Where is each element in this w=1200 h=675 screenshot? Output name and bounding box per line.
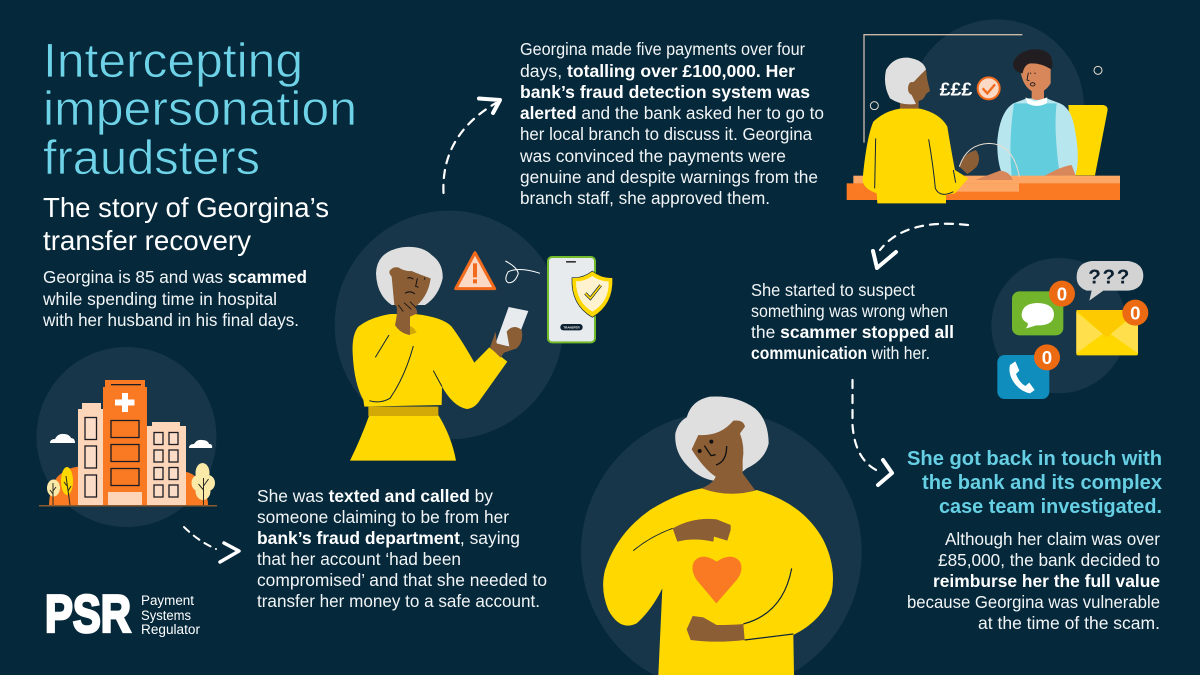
illustration: Georgina with phone (335, 211, 613, 461)
text block: outcome: Although her claim was over (945, 529, 1160, 549)
clouds (50, 434, 212, 448)
envelope icon: 0 (1130, 302, 1141, 323)
text block: introduction (42, 267, 307, 330)
skirt (350, 415, 456, 461)
phone in hand (495, 307, 528, 347)
message icon (1012, 281, 1075, 335)
arrow: to payments text (443, 98, 500, 193)
text block: introduction: while spending time in hospital (42, 289, 277, 309)
arrow: branch to suspect text (873, 224, 968, 268)
speech bubble (1077, 261, 1143, 301)
text block: texted and called: that her account ‘had been (257, 549, 461, 569)
illustration: message icons (991, 258, 1148, 399)
title (43, 35, 357, 185)
text block: payments (519, 39, 824, 208)
jumper (603, 488, 833, 675)
hair (675, 396, 769, 481)
text block: texted and called (257, 486, 547, 611)
heading: outcome: the bank and its complex (922, 472, 1162, 494)
chair (1068, 105, 1108, 175)
right building (147, 422, 186, 505)
pounds and tick: £££ (940, 78, 972, 99)
phone with shield (548, 257, 613, 342)
centre building (103, 380, 147, 505)
phone with shield: TRANSFER (563, 325, 580, 329)
lower hand (687, 616, 745, 642)
heart (692, 557, 741, 603)
text block: outcome: at the time of the scam. (978, 613, 1160, 633)
illustration: Georgina happy (581, 396, 862, 675)
phone icon: 0 (1042, 347, 1052, 368)
warning triangle (456, 253, 495, 289)
counter (853, 176, 1120, 184)
face and neck (692, 420, 755, 495)
neck and face (389, 267, 431, 312)
squiggle (505, 261, 540, 283)
bank clerk (997, 49, 1078, 177)
illustration: bank branch (847, 19, 1120, 203)
text block: payments: her local branch to discuss it. Georgina (520, 124, 812, 144)
message icon: 0 (1057, 283, 1067, 304)
text block: suspicion (751, 280, 954, 363)
envelope icon (1076, 300, 1148, 355)
text block: payments: bank’s fraud detection system was (520, 82, 810, 102)
arrow: suspicion to outcome (852, 380, 892, 485)
phone icon (997, 344, 1060, 399)
title: fraudsters (43, 132, 260, 185)
text block: suspicion: She started to suspect (751, 280, 915, 300)
Georgina from behind (863, 58, 1013, 203)
title: impersonation (43, 83, 357, 136)
text block: payments: branch staff, she approved them. (520, 188, 770, 208)
subtitle: The story of Georgina’s (43, 192, 329, 223)
text block: outcome (907, 529, 1160, 633)
upper hand (673, 519, 731, 542)
text block: introduction: with her husband in his final days. (42, 310, 299, 330)
text block: suspicion: something was wrong when (751, 301, 948, 321)
logo: PSR: Payment (141, 593, 194, 608)
text block: payments: Georgina made five payments over four (520, 39, 805, 59)
subtitle (43, 192, 329, 256)
text block: payments: genuine and despite warnings from the (520, 167, 818, 187)
illustration: hospital (36, 347, 217, 527)
text block: outcome: £85,000, the bank decided to (938, 550, 1160, 570)
arrow: hospital to text (184, 527, 239, 562)
trees (47, 463, 215, 505)
hair (376, 247, 443, 305)
heading: outcome: She got back in touch with (907, 448, 1162, 470)
jumper (353, 314, 507, 409)
logo: PSR: PSR (45, 585, 131, 644)
text block: introduction: Georgina is 85 and was scammed (43, 267, 307, 287)
text block: texted and called: bank’s fraud department, saying (257, 528, 520, 548)
text block: texted and called: She was texted and called by (257, 486, 493, 506)
text block: texted and called: someone claiming to be from her (257, 507, 509, 527)
text block: payments: was convinced the payments were (519, 146, 786, 166)
text block: outcome: because Georgina was vulnerable (907, 592, 1160, 612)
text block: suspicion: communication with her. (751, 343, 930, 363)
text block: payments: days, totalling over £100,000. Her (520, 61, 795, 81)
heading: outcome: case team investigated. (939, 496, 1162, 518)
text block: payments: alerted and the bank asked her to go to (520, 103, 824, 123)
subtitle: transfer recovery (43, 225, 251, 256)
arm fold lines (369, 335, 442, 402)
hand at chin (409, 326, 417, 335)
belt (368, 407, 438, 416)
screen frame (864, 35, 1022, 143)
text block: texted and called: compromised’ and that she needed to (257, 570, 547, 590)
text block: suspicion: the scammer stopped all (751, 322, 954, 342)
title: Intercepting (43, 35, 303, 88)
logo: PSR: Regulator (141, 622, 200, 637)
text block: outcome: reimburse her the full value (933, 571, 1160, 591)
speech bubble: ??? (1088, 265, 1131, 288)
heading: outcome (907, 448, 1162, 518)
text block: texted and called: transfer her money to a safe account. (257, 591, 540, 611)
logo: PSR: Systems (141, 608, 191, 623)
left building (78, 403, 103, 505)
pounds and tick (940, 77, 1000, 99)
